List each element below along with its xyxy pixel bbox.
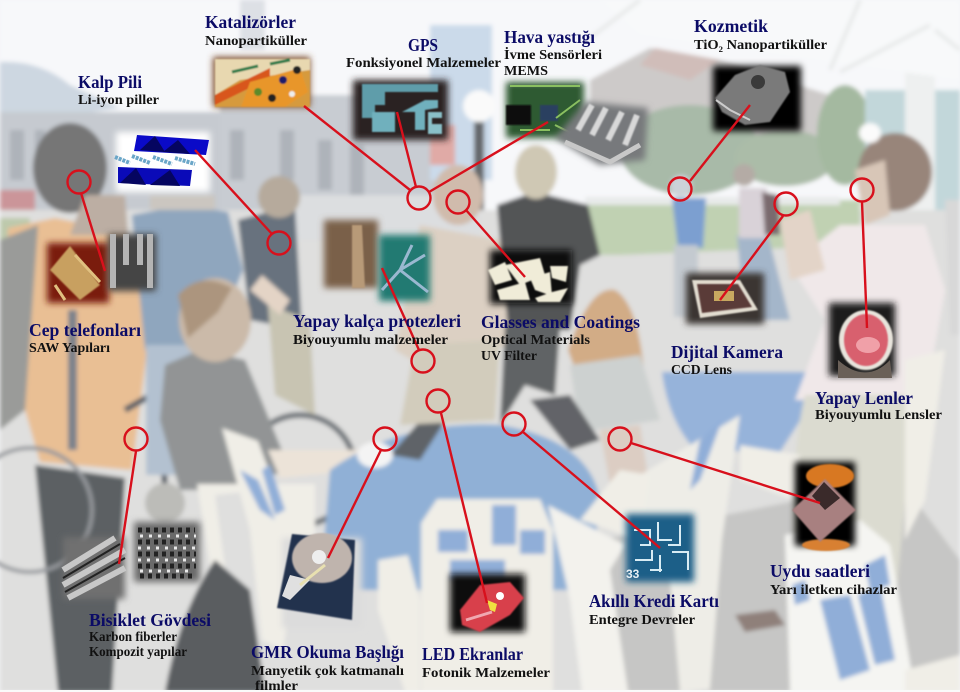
woman — [568, 290, 645, 420]
label: Glasses and Coatings: Glasses and Coatings — [481, 312, 640, 332]
label: Dijital Kamera — [671, 342, 783, 378]
label: GPS: GPS — [408, 35, 438, 55]
label: GMR Okuma Başlığı: GMR Okuma Başlığı — [251, 642, 404, 662]
label: Uydu saatleri: Uydu saatleri — [770, 561, 870, 581]
label: Katalizörler — [205, 12, 307, 49]
label: Dijital Kamera: Dijital Kamera — [671, 342, 783, 362]
table right — [662, 372, 810, 452]
label: Katalizörler: Katalizörler — [205, 12, 296, 32]
label: Akıllı Kredi Kartı: Akıllı Kredi Kartı — [589, 591, 719, 611]
label: Cep telefonları: Cep telefonları — [29, 320, 141, 340]
label: Cep telefonları — [29, 320, 141, 356]
label: GPS: Fonksiyonel Malzemeler — [346, 56, 501, 71]
label: Bisiklet Gövdesi: Karbon fiberler — [89, 630, 177, 645]
label: LED Ekranlar: LED Ekranlar — [422, 644, 523, 664]
thumbnail: GPS circuit — [353, 80, 448, 140]
right man — [790, 225, 945, 400]
label: Dijital Kamera: CCD Lens — [671, 363, 733, 378]
thumbnail: Li-ion battery — [115, 132, 210, 192]
label: LED Ekranlar: Fotonik Malzemeler — [422, 666, 550, 681]
seated man — [160, 350, 290, 490]
label: Yapay Lenler: Yapay Lenler — [815, 388, 913, 408]
callout: eye — [850, 178, 874, 328]
callout: glasses — [446, 190, 525, 277]
label: Yapay Lenler — [815, 388, 942, 423]
thumbnail: LED — [450, 574, 525, 632]
label: Yapay kalça protezleri: Yapay kalça protezleri — [293, 311, 461, 331]
label: Uydu saatleri — [770, 561, 897, 598]
callout: battery — [195, 150, 290, 254]
label: GMR Okuma Başlığı — [251, 642, 404, 692]
label: Katalizörler: Nanopartiküller — [205, 34, 307, 49]
label: Yapay kalça protezleri — [293, 311, 461, 348]
thumbnail: bicycle carbon fibres — [63, 522, 200, 599]
thumbnail: artificial lens — [829, 303, 895, 378]
label: Bisiklet Gövdesi — [89, 610, 211, 660]
label: Kozmetik — [694, 16, 827, 53]
label: GPS — [346, 35, 501, 71]
callout: car hub — [304, 106, 548, 210]
woman in blue — [672, 198, 706, 248]
label: Glasses and Coatings: Optical Materials — [481, 333, 591, 348]
black shirt man — [497, 192, 600, 330]
callout: cosmetics — [668, 105, 750, 200]
blue shirt man — [132, 205, 243, 350]
table centre — [320, 425, 600, 590]
thumbnail: smart card chip: 33 — [626, 567, 640, 581]
label: Hava yastığı: İvme Sensörleri — [504, 46, 602, 63]
label: Kalp Pili — [78, 72, 159, 108]
glasses man — [395, 225, 512, 365]
label: Kozmetik: Kozmetik — [694, 16, 768, 36]
thumbnail: SAW structures — [47, 234, 156, 303]
label: GMR Okuma Başlığı: Manyetik çok katmanalı — [251, 664, 404, 679]
label: Kalp Pili: Li-iyon piller — [78, 93, 159, 108]
label: Uydu saatleri: Yarı iletken cihazlar — [770, 583, 897, 598]
callout: display — [426, 390, 487, 603]
thumbnail: hip implant and neuron — [324, 220, 430, 301]
callout: camera — [720, 192, 798, 300]
label: Kozmetik: TiO₂ Nanopartiküller — [694, 38, 827, 53]
label: Hava yastığı: Hava yastığı — [504, 27, 595, 47]
label: Hava yastığı — [504, 27, 602, 79]
thumbnail: MEMS — [506, 82, 648, 165]
thumbnail: cosmetics nanoparticle — [713, 65, 801, 131]
chairs — [197, 350, 960, 692]
callout: hip — [382, 268, 434, 372]
label: Glasses and Coatings — [481, 312, 640, 364]
label: Hava yastığı: MEMS — [504, 64, 548, 79]
label: Akıllı Kredi Kartı — [589, 591, 719, 628]
bike — [0, 448, 92, 572]
label: Bisiklet Gövdesi: Kompozit yapılar — [89, 645, 187, 660]
callout: card — [502, 412, 660, 548]
callout: phone — [68, 170, 105, 271]
label: Akıllı Kredi Kartı: Entegre Devreler — [589, 613, 695, 628]
callout: hard disk — [328, 428, 396, 558]
thumbnail: satellite clock chip — [792, 462, 856, 551]
thumbnail: hard disk — [277, 533, 362, 628]
callout lines and circles — [68, 105, 874, 603]
thumbnails — [47, 57, 895, 632]
thumbnail: CCD chip — [686, 273, 764, 324]
label: Yapay kalça protezleri: Biyouyumlu malzemeler — [293, 333, 448, 348]
dark man — [238, 205, 302, 330]
label: Kalp Pili: Kalp Pili — [78, 72, 142, 92]
callout: watch — [608, 428, 820, 503]
thumbnail: optical coatings — [488, 250, 572, 304]
left man — [5, 218, 152, 470]
thumbnail: catalysts — [213, 57, 310, 107]
label: Yapay Lenler: Biyouyumlu Lensler — [815, 408, 942, 423]
label: Glasses and Coatings: UV Filter — [481, 349, 537, 364]
thumbnail: smart card chip — [626, 514, 694, 582]
label: LED Ekranlar — [422, 644, 550, 681]
label: Cep telefonları: SAW Yapıları — [29, 341, 110, 356]
label: Bisiklet Gövdesi: Bisiklet Gövdesi — [89, 610, 211, 630]
callout: bicycle — [119, 428, 148, 564]
